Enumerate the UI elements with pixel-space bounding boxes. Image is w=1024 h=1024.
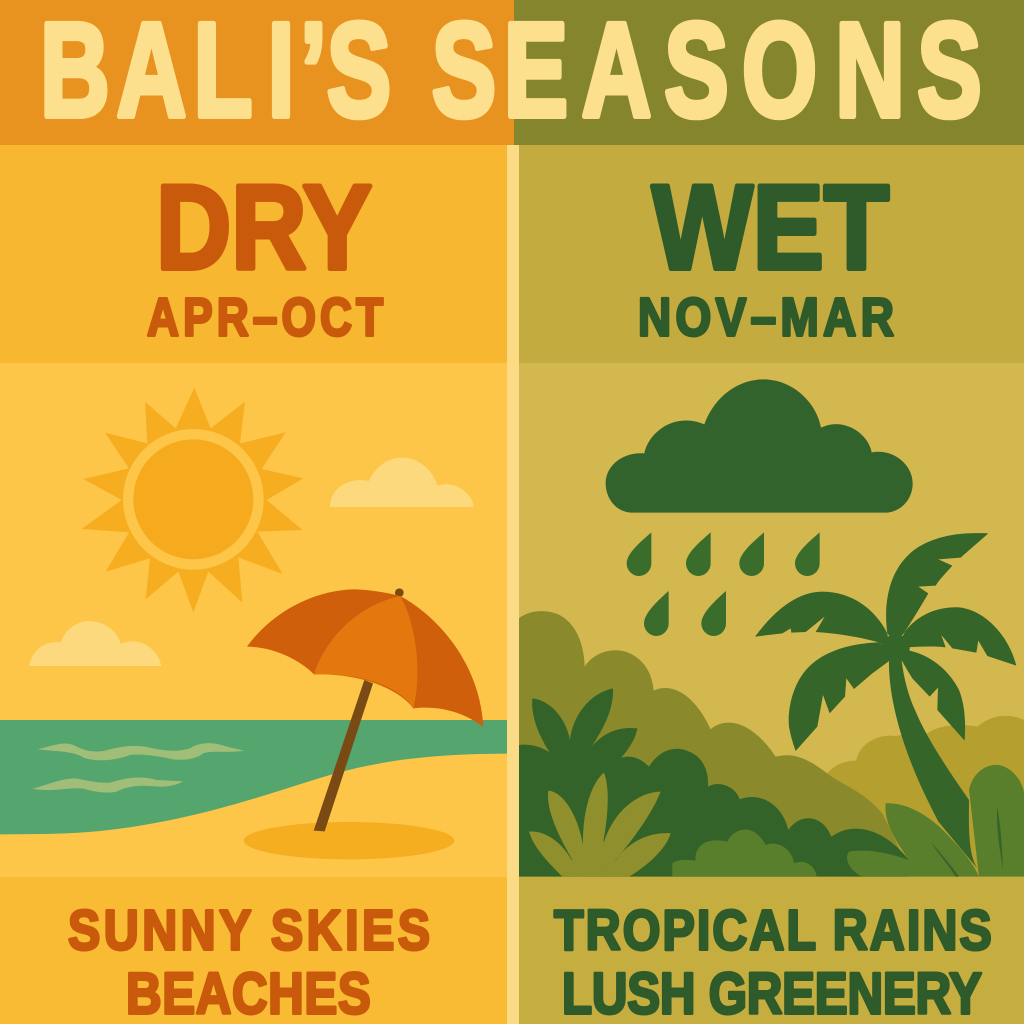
dates: Apr-Oct: APR–OCT <box>147 287 383 348</box>
foliage and palm <box>519 533 1024 877</box>
dry footer block <box>0 877 507 1024</box>
sea and waves <box>0 720 507 834</box>
heading: WET: WET <box>652 160 889 294</box>
rainforest illustration <box>519 363 1024 877</box>
label: sunny skies: SUNNY SKIES <box>68 899 430 962</box>
panel: title banner <box>0 0 1024 145</box>
panel: wet season <box>519 145 1024 1024</box>
dry header block <box>0 145 507 363</box>
icon: sun <box>82 388 303 612</box>
beach illustration <box>0 363 507 877</box>
wet footer block <box>519 877 1024 1024</box>
icon: rain cloud <box>606 379 913 513</box>
dates: Nov-Mar: NOV–MAR <box>638 287 894 347</box>
heading: DRY: DRY <box>156 160 372 294</box>
panel: dry season <box>0 145 507 1024</box>
icon: beach umbrella <box>244 588 483 859</box>
icon: upper cloud <box>330 458 474 507</box>
icon: lower cloud <box>29 621 161 666</box>
label: tropical rains: TROPICAL RAINS <box>554 899 992 962</box>
icon: rain drops <box>627 532 820 636</box>
wet header block <box>519 145 1024 363</box>
